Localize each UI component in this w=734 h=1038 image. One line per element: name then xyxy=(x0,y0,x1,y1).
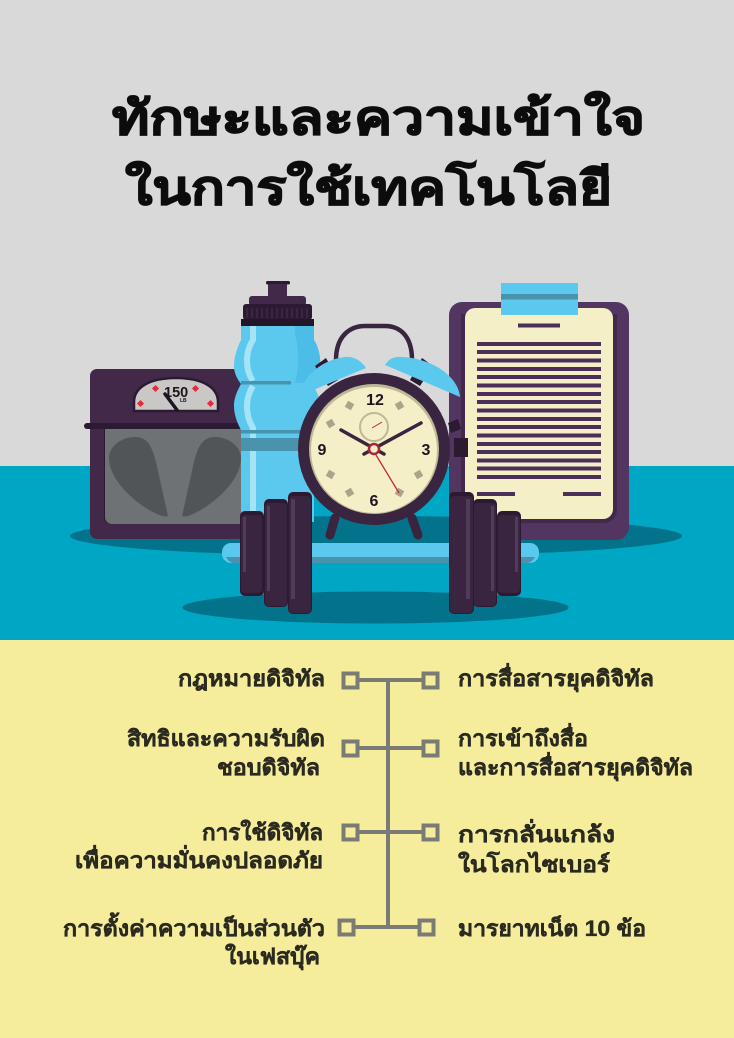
icon: alarm clock: 6 xyxy=(370,493,379,510)
illustration: fitness equipment xyxy=(70,281,682,624)
icon: clipboard xyxy=(449,283,629,540)
title: ทักษะและความเข้าใจ xyxy=(112,90,645,144)
connector nodes xyxy=(340,674,438,934)
labels: left column: สิทธิและความรับผิด xyxy=(127,726,325,751)
labels: left column: ชอบดิจิทัล xyxy=(217,755,320,780)
icon: alarm clock: 3 xyxy=(422,442,431,459)
labels: right column: การเข้าถึงสื่อ xyxy=(458,722,588,751)
labels: right column: และการสื่อสารยุคดิจิทัล xyxy=(458,751,693,782)
labels: left column xyxy=(63,666,325,971)
title xyxy=(112,90,645,214)
labels: right column: การสื่อสารยุคดิจิทัล xyxy=(458,662,654,693)
icon: alarm clock: 9 xyxy=(318,442,327,459)
icon: dumbbell plates right xyxy=(449,492,521,614)
shadow: back items xyxy=(70,516,682,556)
icon: barbell bar xyxy=(222,543,539,563)
icon: weighing scale: LB xyxy=(180,398,187,404)
labels: right column: มารยาทเน็ต 10 ข้อ xyxy=(458,914,646,941)
shadow: dumbbell xyxy=(182,592,568,624)
labels: left column: เพื่อความมั่นคงปลอดภัย xyxy=(75,844,323,873)
connector diagram xyxy=(340,674,438,934)
icon: weighing scale: 150 xyxy=(164,385,188,401)
labels: left column: การตั้งค่าความเป็นส่วนตัว xyxy=(63,912,325,941)
labels: right column: ในโลกไซเบอร์ xyxy=(458,851,610,877)
title: ในการใช้เทคโนโลยี xyxy=(125,160,612,214)
labels: right column xyxy=(458,662,693,941)
icon: alarm clock xyxy=(298,326,468,535)
labels: left column: กฎหมายดิจิทัล xyxy=(178,666,325,691)
icon: weighing scale xyxy=(84,369,250,539)
icon: dumbbell plates left xyxy=(240,492,312,614)
labels: right column: การกลั่นแกล้ง xyxy=(458,818,615,847)
icon: water bottle xyxy=(234,281,320,522)
labels: left column: ในเฟสบุ๊ค xyxy=(225,943,320,971)
labels: left column: การใช้ดิจิทัล xyxy=(202,819,323,845)
icon: alarm clock: 12 xyxy=(366,392,384,409)
